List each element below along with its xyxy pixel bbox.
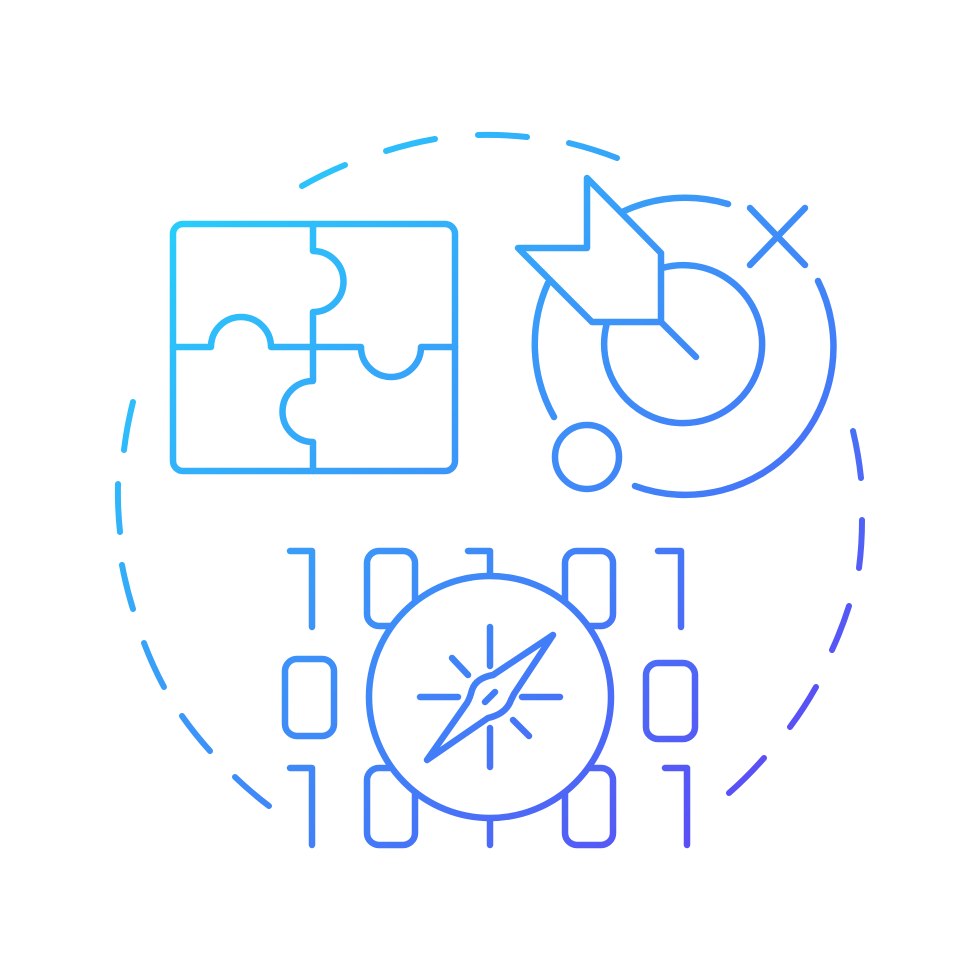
arrow shaft xyxy=(661,322,696,357)
cross mark xyxy=(750,208,805,265)
icon: compass xyxy=(369,576,611,818)
compass dial xyxy=(369,576,611,818)
compass marks xyxy=(420,627,560,767)
binary digits xyxy=(285,551,695,845)
arrow xyxy=(518,178,661,322)
needle pivot xyxy=(485,692,495,702)
small circle xyxy=(555,425,619,489)
inner ring xyxy=(604,265,762,423)
icon: target with arrow xyxy=(518,178,833,495)
compass needle xyxy=(427,635,553,760)
dashed circle border xyxy=(118,135,862,806)
outer ring arcs xyxy=(535,198,833,495)
icon: puzzle xyxy=(173,224,455,471)
